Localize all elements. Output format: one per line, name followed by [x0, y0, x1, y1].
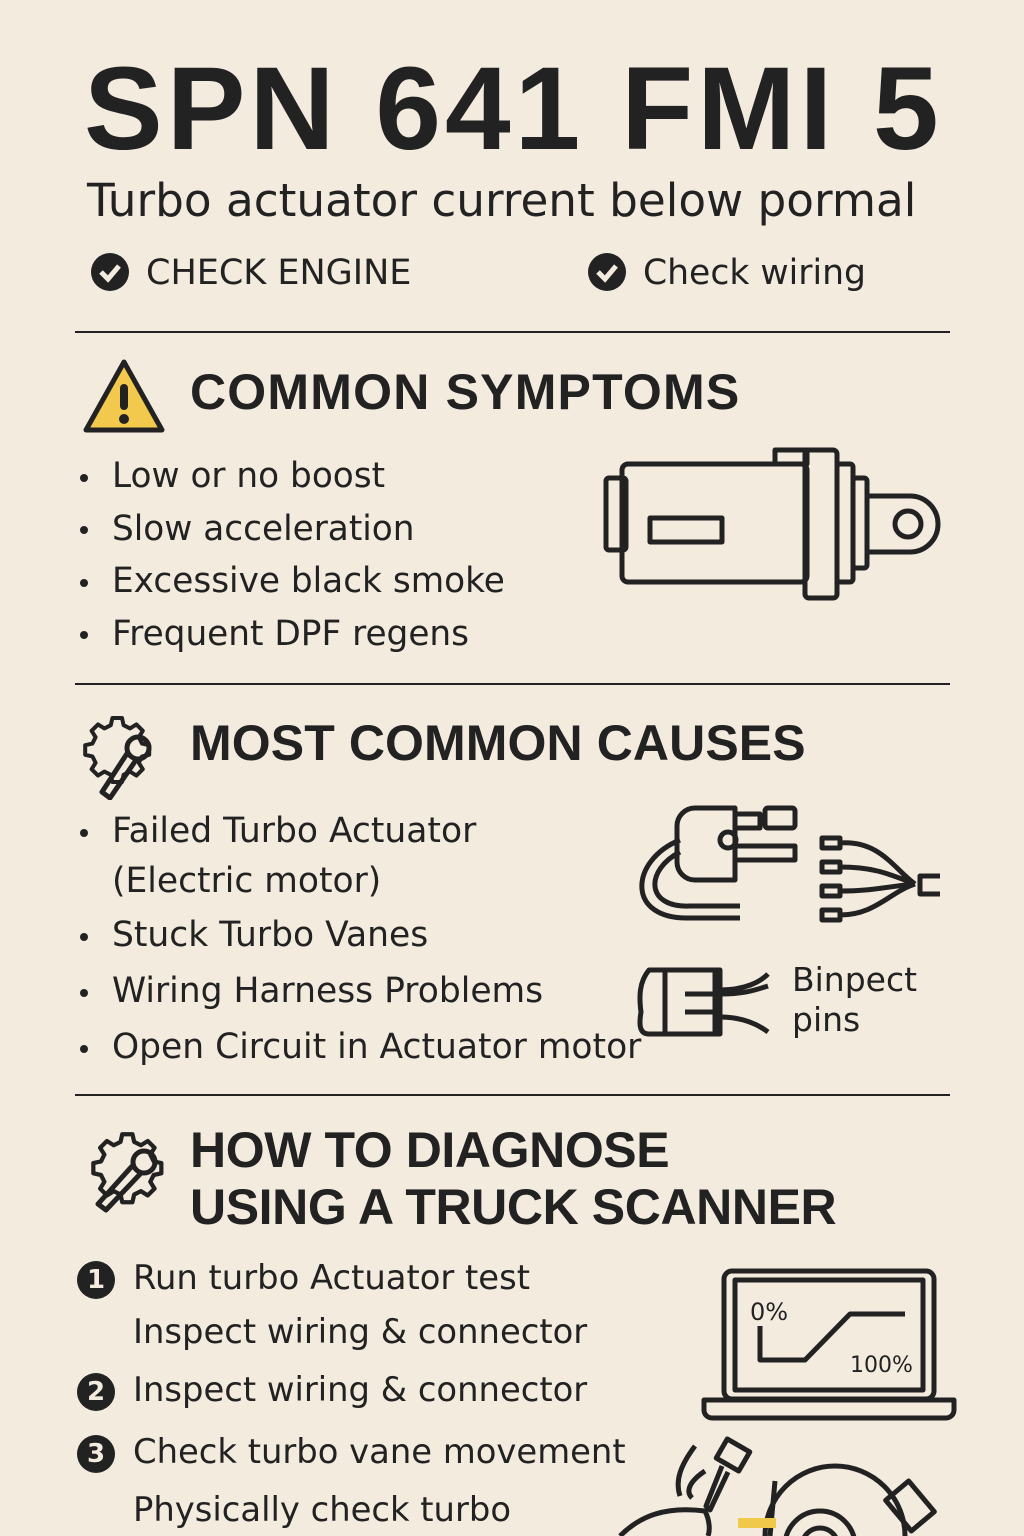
causes list: Stuck Turbo Vanes [112, 915, 428, 955]
icon: actuator [604, 448, 940, 600]
symptoms list [80, 456, 505, 654]
icon: plug [638, 968, 770, 1036]
diagnose steps: Inspect wiring & connector [133, 1370, 587, 1409]
subtitle: Turbo actuator current below pormal [87, 174, 916, 227]
diagnose steps: 3 [87, 1438, 105, 1468]
icon: warning [84, 360, 164, 432]
icon: laptop scanner: 100% [850, 1353, 913, 1378]
icon: laptop scanner: 0% [750, 1298, 788, 1326]
causes list [80, 811, 642, 1067]
diagnose steps: 1 [87, 1264, 105, 1294]
diagnose steps: Run turbo Actuator test [133, 1258, 530, 1297]
symptoms list: Frequent DPF regens [112, 614, 469, 654]
icon: laptop scanner [702, 1268, 956, 1420]
heading: diagnose [190, 1122, 836, 1235]
diagnose steps: Physically check turbo [133, 1490, 511, 1529]
causes list: (Electric motor) [112, 861, 381, 901]
causes list: Open Circuit in Actuator motor [112, 1027, 641, 1067]
icon: gear wrench [83, 716, 152, 800]
symptoms list: Low or no boost [112, 456, 385, 496]
check: check wiring: Check wiring [643, 253, 866, 293]
label: binpect pins [792, 960, 917, 1039]
icon: gear wrench 2 [91, 1132, 164, 1213]
diagnose steps: Inspect wiring & connector [133, 1312, 587, 1351]
heading: common symptoms: COMMON SYMPTOMS [190, 364, 740, 420]
diagnose steps: Check turbo vane movement [133, 1432, 626, 1471]
label: binpect pins: Binpect [792, 960, 917, 999]
causes list: Failed Turbo Actuator [112, 811, 476, 851]
symptoms list: Excessive black smoke [112, 561, 505, 601]
symptoms list: Slow acceleration [112, 508, 415, 548]
label: binpect pins: pins [792, 1000, 860, 1039]
icon: turbo and tool [618, 1436, 937, 1536]
heading: diagnose: HOW TO DIAGNOSE [190, 1122, 669, 1178]
check: check engine: CHECK ENGINE [146, 253, 411, 293]
causes list: Wiring Harness Problems [112, 971, 543, 1011]
heading: causes: MOST COMMON CAUSES [190, 715, 806, 771]
icon: connectors [639, 806, 940, 922]
title: SPN 641 FMI 5 [84, 43, 943, 175]
diagnose steps: 2 [87, 1376, 105, 1406]
heading: diagnose: USING A TRUCK SCANNER [190, 1179, 836, 1235]
diagnose steps [77, 1258, 626, 1529]
